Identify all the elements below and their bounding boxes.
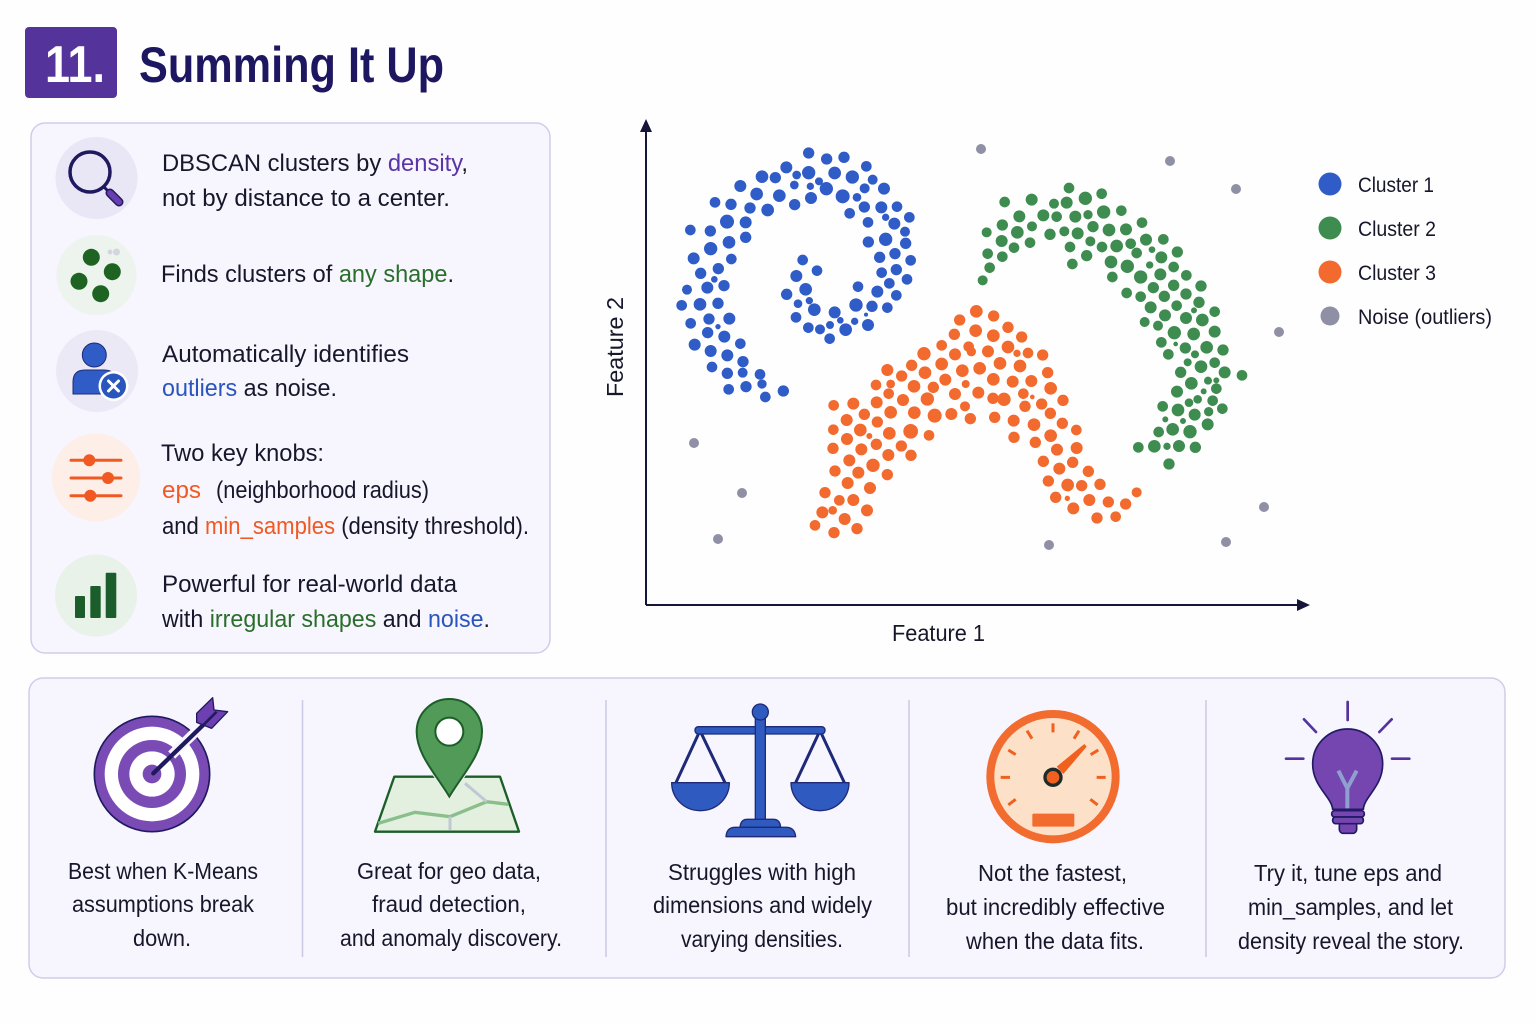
cluster 2 points [978,183,1247,469]
text: density: DBSCAN clusters by density, [162,150,468,177]
text: not the fastest [946,860,1165,954]
panel: key takeaways [31,123,550,653]
text: geo data: fraud detection, [372,891,526,917]
text: high dimensions: Struggles with high [668,859,856,885]
text: any shape: Finds clusters of any shape. [161,261,454,288]
text: K-Means: Best when K-Means [68,858,258,884]
text: real-world data: with irregular shapes and noise. [161,606,490,633]
axes [640,119,1310,611]
legend: Cluster 3 [1358,262,1436,285]
cluster 3 points [810,305,1141,538]
legend: Noise (outliers) [1358,306,1492,329]
text: geo data: Great for geo data, [357,858,541,884]
number badge: 11. [45,36,105,94]
panel: when to use [29,678,1505,978]
legend: Cluster 1 [1358,174,1434,197]
legend [1318,172,1492,329]
text: K-Means [68,858,258,951]
text: two key knobs: and min_samples (density threshold). [162,513,529,540]
number badge [25,27,117,98]
text: two key knobs: eps [162,477,201,504]
text: geo data [340,858,562,951]
cluster 1 points [677,148,916,402]
noise points [689,144,1284,550]
icon: magnifying glass [56,137,138,219]
icon: map pin [375,696,519,832]
text: outliers [162,341,409,402]
icon: sliders [52,434,140,522]
text: try it: density reveal the story. [1238,928,1464,954]
scatter chart [602,119,1492,646]
icon: bar chart [55,554,137,636]
text: density [162,150,468,212]
text: two key knobs [161,440,529,540]
text: high dimensions: varying densities. [681,926,843,952]
text: high dimensions: dimensions and widely [653,892,872,918]
axis label: Feature 1: Feature 1 [892,620,985,646]
text: try it [1238,860,1464,954]
legend: Cluster 2 [1358,218,1436,241]
text: geo data: and anomaly discovery. [340,925,562,951]
text: outliers: outliers as noise. [162,375,337,402]
title: Summing It Up [139,37,444,93]
icon: cluster dots [56,235,136,315]
axis label: Feature 2: Feature 2 [602,297,628,397]
icon: balance scales [672,704,849,837]
text: try it: min_samples, and let [1248,894,1454,920]
icon: speedometer [990,714,1116,839]
text: real-world data [161,571,490,633]
text: K-Means: down. [133,925,191,951]
icon: user with x badge [56,330,138,412]
text: outliers: Automatically identifies [162,341,409,368]
text: density: not by distance to a center. [162,185,450,212]
text: real-world data: Powerful for real-world data [162,571,458,598]
icon: light bulb [1286,702,1409,833]
icon: target with arrow [94,698,228,832]
text: two key knobs: Two key knobs: [161,440,324,467]
text: not the fastest: when the data fits. [965,928,1144,954]
text: try it: Try it, tune eps and [1254,860,1442,886]
text: high dimensions [653,859,872,952]
text: two key knobs: (neighborhood radius) [216,477,429,504]
text: not the fastest: Not the fastest, [978,860,1127,886]
text: not the fastest: but incredibly effective [946,894,1165,920]
text: K-Means: assumptions break [72,891,254,917]
